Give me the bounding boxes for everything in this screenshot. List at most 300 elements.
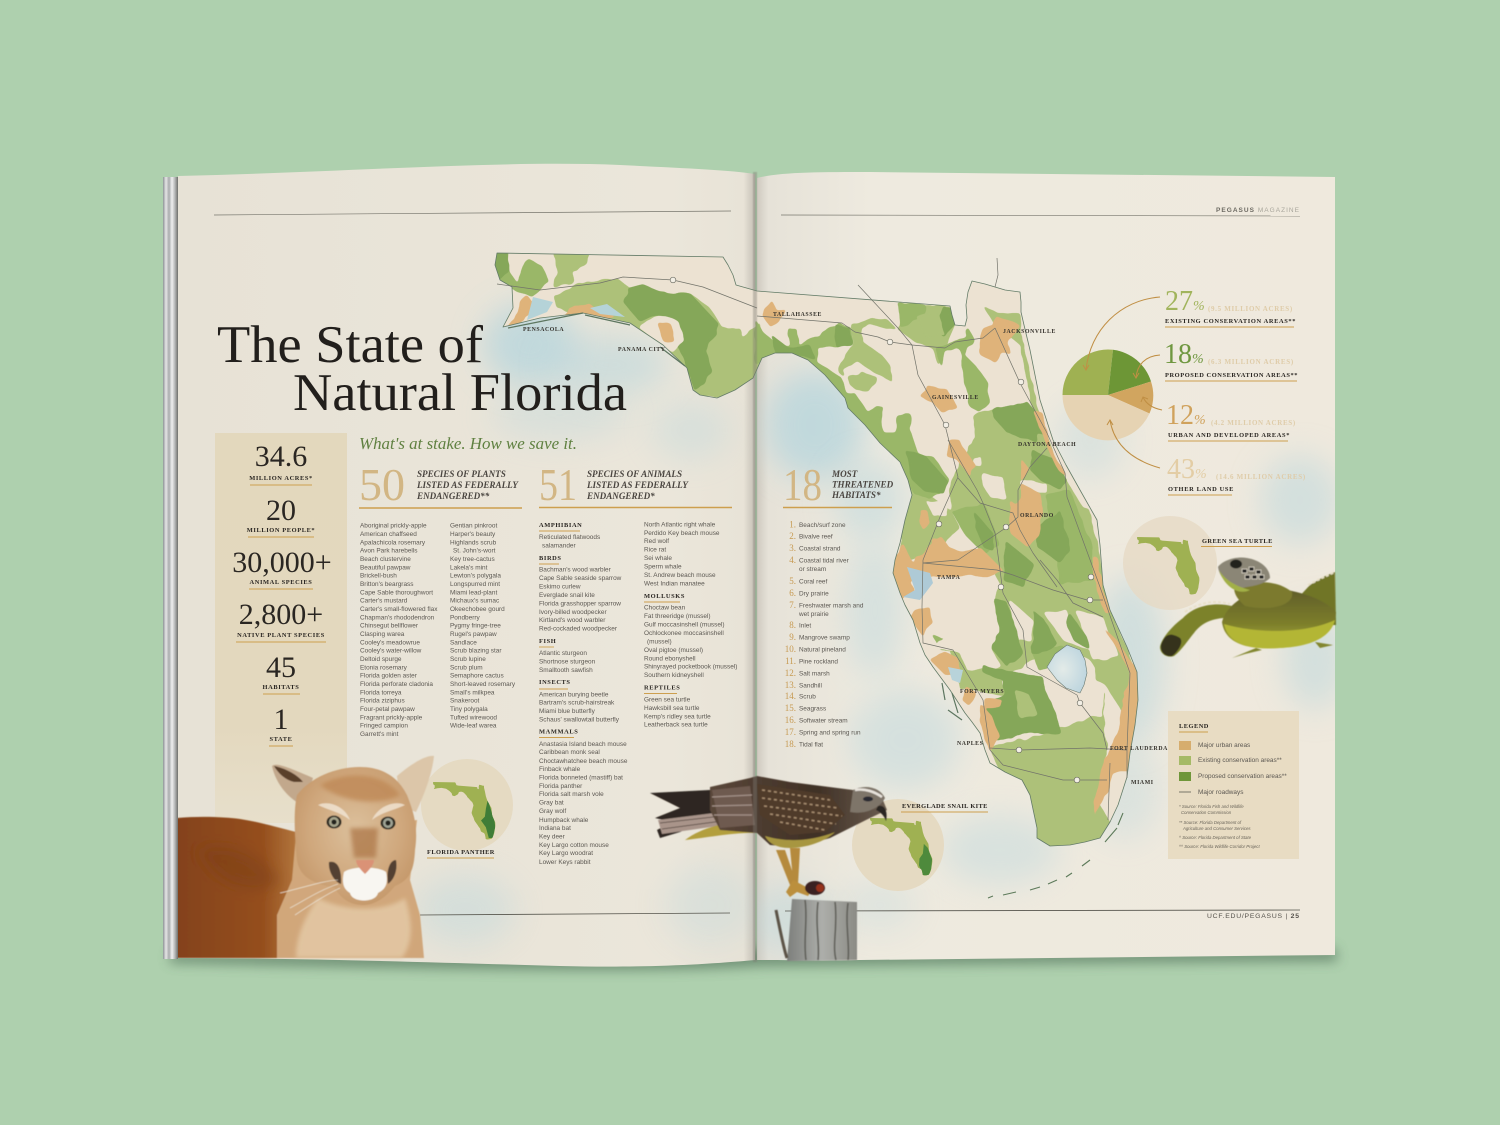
list: plants column 1: Apalachicola rosemary <box>360 539 426 546</box>
species names: Finback whale <box>539 766 581 773</box>
list: plants column 1: Brickell-bush <box>360 573 397 580</box>
other <box>1062 395 1150 440</box>
list: plants column 1: American chaffseed <box>360 531 417 538</box>
species names: St. Andrew beach mouse <box>644 572 716 579</box>
habitat numbers: 12. <box>785 668 796 678</box>
species names: salamander <box>542 542 576 549</box>
habitat numbers: 9. <box>789 632 796 642</box>
stat: plant species: NATIVE PLANT SPECIES <box>237 632 325 639</box>
species names: Oval pigtoe (mussel) <box>644 647 703 654</box>
species names: Florida grasshopper sparrow <box>539 600 621 607</box>
list: plants column 1: Deltoid spurge <box>360 656 402 663</box>
list: plants column 1: Florida torreya <box>360 689 402 696</box>
body <box>177 817 300 958</box>
stat: existing conservation 27%: (9.5 MILLION ACRES) <box>1208 305 1293 313</box>
stat: proposed conservation 18%: (6.3 MILLION ACRES) <box>1208 358 1294 366</box>
head <box>1218 558 1270 588</box>
heading: 51 animals <box>539 460 732 510</box>
list: plants column 2: Gentian pinkroot <box>450 523 497 530</box>
species names: Leatherback sea turtle <box>644 722 708 728</box>
species names: Cape Sable seaside sparrow <box>539 575 622 582</box>
species names: Lower Keys rabbit <box>539 859 591 866</box>
city labels: FORT MYERS <box>960 689 1004 695</box>
species names: Red-cockaded woodpecker <box>539 626 618 633</box>
gulf islands <box>508 313 962 720</box>
group headings: MOLLUSKS <box>644 593 685 600</box>
species names: Perdido Key beach mouse <box>644 530 720 537</box>
habitat names: Softwater stream <box>799 718 848 724</box>
stat: proposed conservation 18% <box>1164 339 1298 381</box>
species names: Key deer <box>539 834 566 840</box>
habitat names: Scrub <box>799 694 816 700</box>
stat: state <box>269 703 293 746</box>
footer rules <box>420 910 1300 915</box>
unprotected land gaps <box>638 314 1120 717</box>
stat: other 43%: OTHER LAND USE <box>1168 486 1234 493</box>
habitat names: Inlet <box>799 622 811 630</box>
habitat numbers: 8. <box>789 620 796 630</box>
habitat names: Mangrove swamp <box>799 634 850 642</box>
muzzle markings <box>329 860 397 884</box>
habitat names: Seagrass <box>799 706 826 712</box>
habitat names: Bivalve reef <box>799 534 833 540</box>
nose <box>356 860 374 874</box>
list: plants column 1: Britton's beargrass <box>360 581 413 588</box>
heading: 50 plants <box>359 460 522 510</box>
list: plants column 2: Scrub blazing star <box>450 648 502 655</box>
title <box>217 316 627 422</box>
footnotes: ^^ Source: Florida Wildlife Corridor Project <box>1179 844 1260 849</box>
city labels: PANAMA CITY <box>618 347 666 353</box>
habitat numbers: 11. <box>785 656 796 666</box>
map land base <box>495 253 1138 846</box>
callout: green sea turtle range: GREEN SEA TURTLE <box>1202 538 1273 545</box>
list: habitats <box>785 520 864 749</box>
list: plants column 2: Snakeroot <box>450 698 480 705</box>
post <box>787 899 857 961</box>
proposed conservation <box>1108 350 1151 395</box>
existing conservation, light <box>553 250 1138 852</box>
species names: Sperm whale <box>644 564 682 571</box>
city labels: TALLAHASSEE <box>773 312 822 318</box>
list: plants column 2: Michaux's sumac <box>450 598 500 605</box>
city labels: TAMPA <box>937 575 961 581</box>
panel: state statistics <box>215 433 347 823</box>
habitat numbers: 18. <box>785 739 796 749</box>
habitat numbers: 5. <box>789 576 796 586</box>
species names: (mussel) <box>647 639 672 646</box>
legend: proposed: Proposed conservation areas** <box>1198 773 1287 780</box>
list: plants column 2: Tiny polygala <box>450 706 488 713</box>
habitat names: Dry prairie <box>799 590 829 598</box>
list: plants column 1: Carter's mustard <box>360 598 408 605</box>
list: plants column 2: Highlands scrub <box>450 539 497 546</box>
shell and belly <box>1222 588 1336 648</box>
species names: Florida salt marsh vole <box>539 791 604 798</box>
city labels: JACKSONVILLE <box>1003 329 1056 335</box>
heading: 18 habitats: THREATENED <box>832 480 894 490</box>
species names: Green sea turtle <box>644 696 691 704</box>
species names: Eskimo curlew <box>539 584 581 591</box>
habitat names: Freshwater marsh and <box>799 602 864 610</box>
mini map <box>1137 537 1199 595</box>
group headings: REPTILES <box>644 684 680 692</box>
list: animals column 2 <box>644 522 737 728</box>
city labels: PENSACOLA <box>523 327 564 333</box>
city labels <box>523 312 1177 786</box>
species names: Sei whale <box>644 555 672 562</box>
list: plants column 1: Cape Sable thoroughwort <box>360 589 433 596</box>
footnotes: Agriculture and Consumer Services <box>1182 826 1251 831</box>
species names: Florida bonneted (mastiff) bat <box>539 774 623 782</box>
stat: plant species: 2,800+ <box>239 598 323 631</box>
group headings: AMPHIBIAN <box>539 522 582 529</box>
pale eye patches <box>318 803 405 820</box>
habitat names: wet prairie <box>798 611 829 618</box>
species names: Florida panther <box>539 783 583 790</box>
header rules <box>214 211 1300 216</box>
stat: other 43% <box>1167 454 1306 495</box>
species names: Gray bat <box>539 800 564 806</box>
spine shadow <box>753 172 757 962</box>
list: plants column 1: Four-petal pawpaw <box>360 706 415 713</box>
stat: animal species: ANIMAL SPECIES <box>250 579 312 586</box>
list: plants column 2: St. John's-wort <box>453 548 496 555</box>
group headings: MAMMALS <box>539 728 578 736</box>
photo: florida panther <box>177 756 434 958</box>
heading: 50 plants: 50 <box>359 460 405 510</box>
prey snail <box>805 881 825 895</box>
stat: state: STATE <box>269 736 293 743</box>
species names: Anastasia Island beach mouse <box>539 741 627 748</box>
subheading: What's at stake. How we save it. <box>359 434 577 453</box>
wings and body <box>710 776 887 847</box>
stat: habitats: HABITATS <box>263 684 299 691</box>
head <box>850 787 885 813</box>
habitat numbers: 7. <box>789 600 796 610</box>
city labels: DAYTONA BEACH <box>1018 442 1076 448</box>
list: plants column 1: Florida golden aster <box>360 673 418 680</box>
forehead colouring <box>320 775 400 802</box>
Florida map <box>492 250 1177 898</box>
species names: West Indian manatee <box>644 580 705 587</box>
habitat numbers: 17. <box>785 727 796 737</box>
heading: 18 habitats <box>783 460 894 510</box>
callout: everglade snail kite range <box>852 799 988 891</box>
list: plants column 2: Lewton's polygala <box>450 573 501 580</box>
city labels: GAINESVILLE <box>932 395 979 401</box>
callout: everglade snail kite range: EVERGLADE SNAIL KITE <box>902 803 988 810</box>
title: The State of <box>217 316 483 374</box>
species names: Gulf moccasinshell (mussel) <box>644 621 724 628</box>
species names: Indiana bat <box>539 825 571 832</box>
list: plants column 2: Okeechobee gourd <box>450 606 505 613</box>
habitat numbers: 3. <box>789 543 796 553</box>
Tampa Bay <box>903 567 933 600</box>
heading: 51 animals: 51 <box>539 460 577 510</box>
habitat numbers: 13. <box>785 680 796 690</box>
list: plants column 1: Etonia rosemary <box>360 664 408 671</box>
belly <box>765 832 835 848</box>
existing conservation, medium <box>492 250 1095 672</box>
eye <box>1230 560 1242 568</box>
species names: Choctawhatchee beach mouse <box>539 758 628 765</box>
running head: Pegasus Magazine: PEGASUS MAGAZINE <box>1216 207 1300 214</box>
list: animals column 1 <box>539 522 628 866</box>
stat: existing conservation 27%: EXISTING CONSERVATION AREAS** <box>1165 318 1296 325</box>
habitat names: Salt marsh <box>799 670 830 678</box>
stat: acres: 34.6 <box>255 440 307 473</box>
mini map <box>870 818 932 876</box>
list: plants column 2: Wide-leaf warea <box>450 723 497 730</box>
legend: urban: Major urban areas <box>1198 742 1250 749</box>
species names: Humpback whale <box>539 817 589 824</box>
florida keys <box>988 813 1123 898</box>
habitat names: Sandhill <box>799 682 822 690</box>
stat: habitats <box>263 651 300 694</box>
species names: Atlantic sturgeon <box>539 650 587 657</box>
beak <box>876 806 887 821</box>
species names: Everglade snail kite <box>539 592 595 599</box>
species names: Bartram's scrub-hairstreak <box>539 700 615 707</box>
right ear <box>397 756 434 812</box>
left ear <box>272 765 313 806</box>
species names: Shinyrayed pocketbook (mussel) <box>644 664 737 671</box>
whiskers <box>280 880 340 915</box>
list: plants column 1: Beach clustervine <box>360 556 411 563</box>
state outline <box>495 253 1138 846</box>
list: plants column 2: Small's milkpea <box>450 689 495 696</box>
muzzle bridge <box>350 828 378 858</box>
photo: snail kite on post <box>650 776 887 961</box>
magazine left page <box>163 164 755 967</box>
title: Natural Florida <box>293 364 627 422</box>
species names: Schaus' swallowtail butterfly <box>539 717 620 724</box>
species names: Hawksbill sea turtle <box>644 705 700 712</box>
stat: urban 12% <box>1166 400 1296 441</box>
habitat names: or stream <box>799 566 826 573</box>
Charlotte Harbor <box>948 667 963 683</box>
list: plants column 2: Harper's beauty <box>450 531 496 538</box>
group headings: BIRDS <box>539 555 562 562</box>
list: plants column 1: Fragrant prickly-apple <box>360 714 423 721</box>
inner lighter patch <box>915 313 1038 718</box>
legend: existing: Existing conservation areas** <box>1198 757 1282 764</box>
list: plants column 2: Pondberry <box>450 614 480 621</box>
callout: florida panther range: FLORIDA PANTHER <box>427 849 495 856</box>
heading: 50 plants: ENDANGERED** <box>416 491 490 501</box>
habitat names: Tidal flat <box>799 742 823 748</box>
white muzzle <box>343 868 387 900</box>
eyes <box>326 816 396 830</box>
list: plants column 1: Chapman's rhododendron <box>360 614 435 621</box>
callout: florida panther range <box>421 759 513 858</box>
habitat numbers: 4. <box>789 555 796 565</box>
major urban areas <box>505 295 1140 817</box>
list: plants column 2: Short-leaved rosemary <box>450 681 516 688</box>
legs <box>776 848 800 885</box>
species names: American burying beetle <box>539 691 609 698</box>
heading: 50 plants: SPECIES OF PLANTS <box>417 469 506 479</box>
stat: acres <box>249 440 313 485</box>
species names: Bachman's wood warbler <box>539 567 612 574</box>
folio: UCF.EDU/PEGASUS | 25 <box>1207 913 1299 920</box>
habitat numbers: 2. <box>789 531 796 541</box>
species names: Key Largo woodrat <box>539 850 593 857</box>
heading: 51 animals: ENDANGERED* <box>586 491 655 501</box>
proposed conservation, south-central <box>983 597 1090 742</box>
list: plants column 1: Fringed campion <box>360 723 408 730</box>
habitat names: Coastal strand <box>799 546 841 552</box>
species names: Kemp's ridley sea turtle <box>644 713 711 720</box>
legend: roadways: Major roadways <box>1198 789 1243 796</box>
city labels: MIAMI <box>1131 780 1154 786</box>
species names: Gray wolf <box>539 808 566 815</box>
photo: green sea turtle <box>1160 558 1336 658</box>
legend: proposed <box>1179 772 1287 781</box>
habitat names: Coral reef <box>799 578 827 586</box>
heading: 51 animals: LISTED AS FEDERALLY <box>586 480 689 490</box>
stat: other 43%: 43% <box>1167 454 1207 485</box>
head <box>295 767 416 905</box>
species names: Ochlockonee moccasinshell <box>644 630 724 637</box>
footnotes: ^ Source: Florida Department of State <box>1179 835 1252 840</box>
list: plants column 2: Miami lead-plant <box>450 589 497 596</box>
footnotes: * Source: Florida Fish and Wildlife <box>1179 804 1244 809</box>
species names: Round ebonyshell <box>644 655 696 662</box>
conservation and urban patches <box>492 250 1140 852</box>
habitat numbers: 14. <box>785 691 796 701</box>
habitat numbers: 16. <box>785 715 796 725</box>
list: plants column 2: Scrub plum <box>450 664 483 671</box>
species names: Rice rat <box>644 547 666 554</box>
rear flipper <box>1296 572 1336 625</box>
stat: acres: MILLION ACRES* <box>249 475 313 482</box>
legend: urban <box>1179 741 1250 750</box>
existing conservation <box>1062 350 1113 395</box>
mini map <box>433 782 495 840</box>
proposed conservation, dark <box>494 253 1070 587</box>
wing feathers <box>757 784 845 835</box>
list: plants column 2: Key tree-cactus <box>450 556 495 563</box>
panhandle bays <box>527 297 553 320</box>
list: plants column 2: Sandlace <box>450 639 477 646</box>
arrows to pie <box>1083 297 1162 468</box>
Lake Okeechobee <box>1047 645 1087 693</box>
habitat numbers: 15. <box>785 703 796 713</box>
group headings: FISH <box>539 638 556 645</box>
footnotes: Conservation Commission <box>1181 810 1232 815</box>
page stack edge <box>163 177 178 959</box>
list: plants column 1: Garrett's mint <box>360 731 399 738</box>
list: plants column 2: Semaphore cactus <box>450 673 504 680</box>
species names: Caribbean monk seal <box>539 749 600 756</box>
species names: Smalltooth sawfish <box>539 667 593 674</box>
stat: state: 1 <box>274 703 288 736</box>
list: plants column 2: Scrub lupine <box>450 656 486 663</box>
stat: animal species: 30,000+ <box>232 546 332 579</box>
stat: existing conservation 27%: 27% <box>1165 286 1205 317</box>
habitat names: Beach/surf zone <box>799 522 846 529</box>
heading: 18 habitats: HABITATS* <box>831 490 881 500</box>
stat: existing conservation 27% <box>1165 286 1296 327</box>
front flipper <box>1160 604 1232 657</box>
stat: urban 12%: 12% <box>1166 400 1206 431</box>
panel: legend: LEGEND <box>1179 723 1209 730</box>
city labels: NAPLES <box>957 741 983 747</box>
stat: urban 12%: URBAN AND DEVELOPED AREAS* <box>1168 432 1290 439</box>
species names: Fat threeridge (mussel) <box>644 613 711 620</box>
tail fins <box>1232 642 1333 658</box>
list: plants column 1: Avon Park harebells <box>360 548 418 555</box>
list: plants column 1: Florida ziziphus <box>360 698 405 705</box>
list: plants column 1: Florida perforate cladonia <box>360 681 433 688</box>
watercolor wash right page <box>745 370 1347 955</box>
habitat numbers: 1. <box>789 520 796 530</box>
beak and chin <box>1219 570 1250 592</box>
stat: people: 20 <box>266 494 296 527</box>
stat: proposed conservation 18%: PROPOSED CONSERVATION AREAS** <box>1165 372 1298 379</box>
heading: 50 plants: LISTED AS FEDERALLY <box>416 480 519 490</box>
species names: North Atlantic right whale <box>644 522 716 528</box>
species names: Ivory-billed woodpecker <box>539 609 607 616</box>
urban <box>1108 382 1153 414</box>
species names: Shortnose sturgeon <box>539 658 596 666</box>
list: plants column 2: Lakela's mint <box>450 564 488 571</box>
list: plants column 1: Chinsegut bellflower <box>360 623 419 630</box>
magazine shadow <box>170 948 1338 970</box>
roadways <box>497 258 1130 820</box>
group headings: INSECTS <box>539 679 571 686</box>
pie chart: land use <box>1062 350 1153 440</box>
city labels: FORT LAUDERDALE <box>1110 746 1177 752</box>
stat: people: MILLION PEOPLE* <box>247 527 315 534</box>
stat: people <box>247 494 315 537</box>
city labels: ORLANDO <box>1020 513 1054 519</box>
species names: Key Largo cotton mouse <box>539 842 609 849</box>
habitat numbers: 6. <box>789 588 796 598</box>
watercolor wash left page <box>415 303 755 945</box>
list: plants column 2: Tufted wirewood <box>450 714 497 721</box>
list: plants column 1: Cooley's meadowrue <box>360 639 420 646</box>
list: plants column 2: Rugel's pawpaw <box>450 631 497 638</box>
footnotes: ** Source: Florida Department of <box>1179 820 1242 825</box>
list: plants column 2: Pygmy fringe-tree <box>450 623 501 630</box>
stat: proposed conservation 18%: 18% <box>1164 339 1204 370</box>
stat: habitats: 45 <box>266 651 296 684</box>
callout: green sea turtle range <box>1123 516 1273 610</box>
habitat names: Spring and spring run <box>799 730 861 736</box>
list: plants column 2: Longspurred mint <box>450 581 500 588</box>
panel: legend <box>1168 711 1299 859</box>
tail feathers <box>650 790 725 838</box>
magazine right page <box>757 172 1335 960</box>
list: plants column 1: Carter's small-flowered flax <box>360 606 438 613</box>
habitat numbers: 10. <box>785 644 796 654</box>
heading: 18 habitats: MOST <box>831 469 858 479</box>
neck <box>1234 582 1292 608</box>
list: plants column 1: Beautiful pawpaw <box>360 564 411 571</box>
list: plants column 1: Clasping warea <box>360 631 405 638</box>
species names: Red wolf <box>644 538 669 545</box>
species names: Kirtland's wood warbler <box>539 617 606 624</box>
neck and chest <box>277 820 424 958</box>
habitat names: Coastal tidal river <box>799 558 850 564</box>
species names: Choctaw bean <box>644 605 686 612</box>
heading: 51 animals: SPECIES OF ANIMALS <box>587 469 682 479</box>
road shields <box>670 277 1094 783</box>
head scales <box>1242 567 1264 579</box>
